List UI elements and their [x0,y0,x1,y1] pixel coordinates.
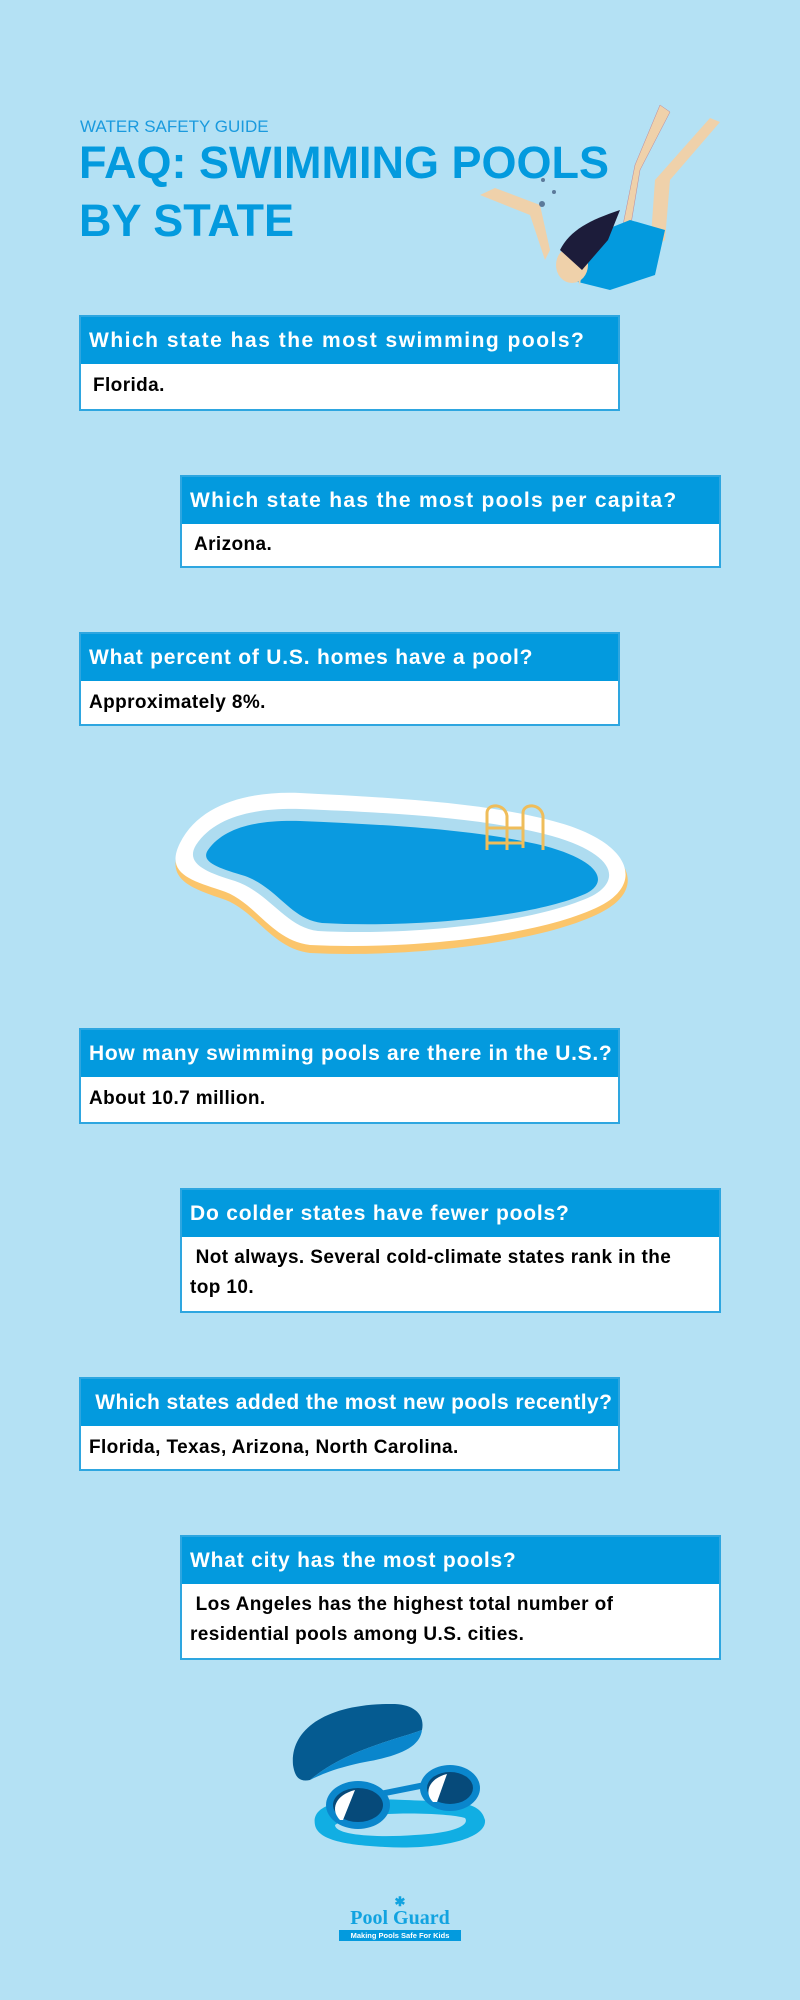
panel: q2: Which state has the most pools per capita? [190,489,678,512]
panel: q1: Florida. [93,375,165,396]
subtitle: WATER SAFETY GUIDE [80,117,269,136]
panel: q3 [79,632,620,726]
logo: Pool Guard [350,1907,450,1929]
panel: q3: Approximately 8%. [89,692,266,713]
icon: cap and goggles [292,1704,486,1848]
panel: q7: What city has the most pools? [190,1549,517,1572]
title [79,137,609,246]
panel: q5: Do colder states have fewer pools? [190,1202,570,1225]
panel: q7: Los Angeles has the highest total number of residential pools among U.S. cities. [190,1594,613,1645]
icon: pool [176,792,628,954]
logo: Making Pools Safe For Kids [351,1931,449,1940]
title: BY STATE [79,195,294,246]
panel: q6: Which states added the most new pools recently? [95,1391,612,1414]
panel: q3: What percent of U.S. homes have a pool? [89,646,533,669]
panel: q6: Florida, Texas, Arizona, North Carolina. [89,1437,459,1458]
icon: swimmer [480,104,720,290]
panel: q1: Which state has the most swimming pools? [89,329,585,352]
logo [339,1894,461,1941]
panel: q7 [180,1535,721,1660]
panel: q2: Arizona. [194,534,272,555]
panel: q4 [79,1028,620,1124]
panel: q6 [79,1377,620,1471]
logo: ✱ [395,1894,405,1909]
title: FAQ: SWIMMING POOLS [79,137,609,188]
panel: q4: About 10.7 million. [89,1088,266,1109]
panel: q5: Not always. Several cold-climate states rank in the top 10. [190,1247,671,1298]
panel: q4: How many swimming pools are there in the U.S.? [89,1042,612,1065]
panel: q1 [79,315,620,411]
panel: q5 [180,1188,721,1313]
panel: q2 [180,475,721,568]
